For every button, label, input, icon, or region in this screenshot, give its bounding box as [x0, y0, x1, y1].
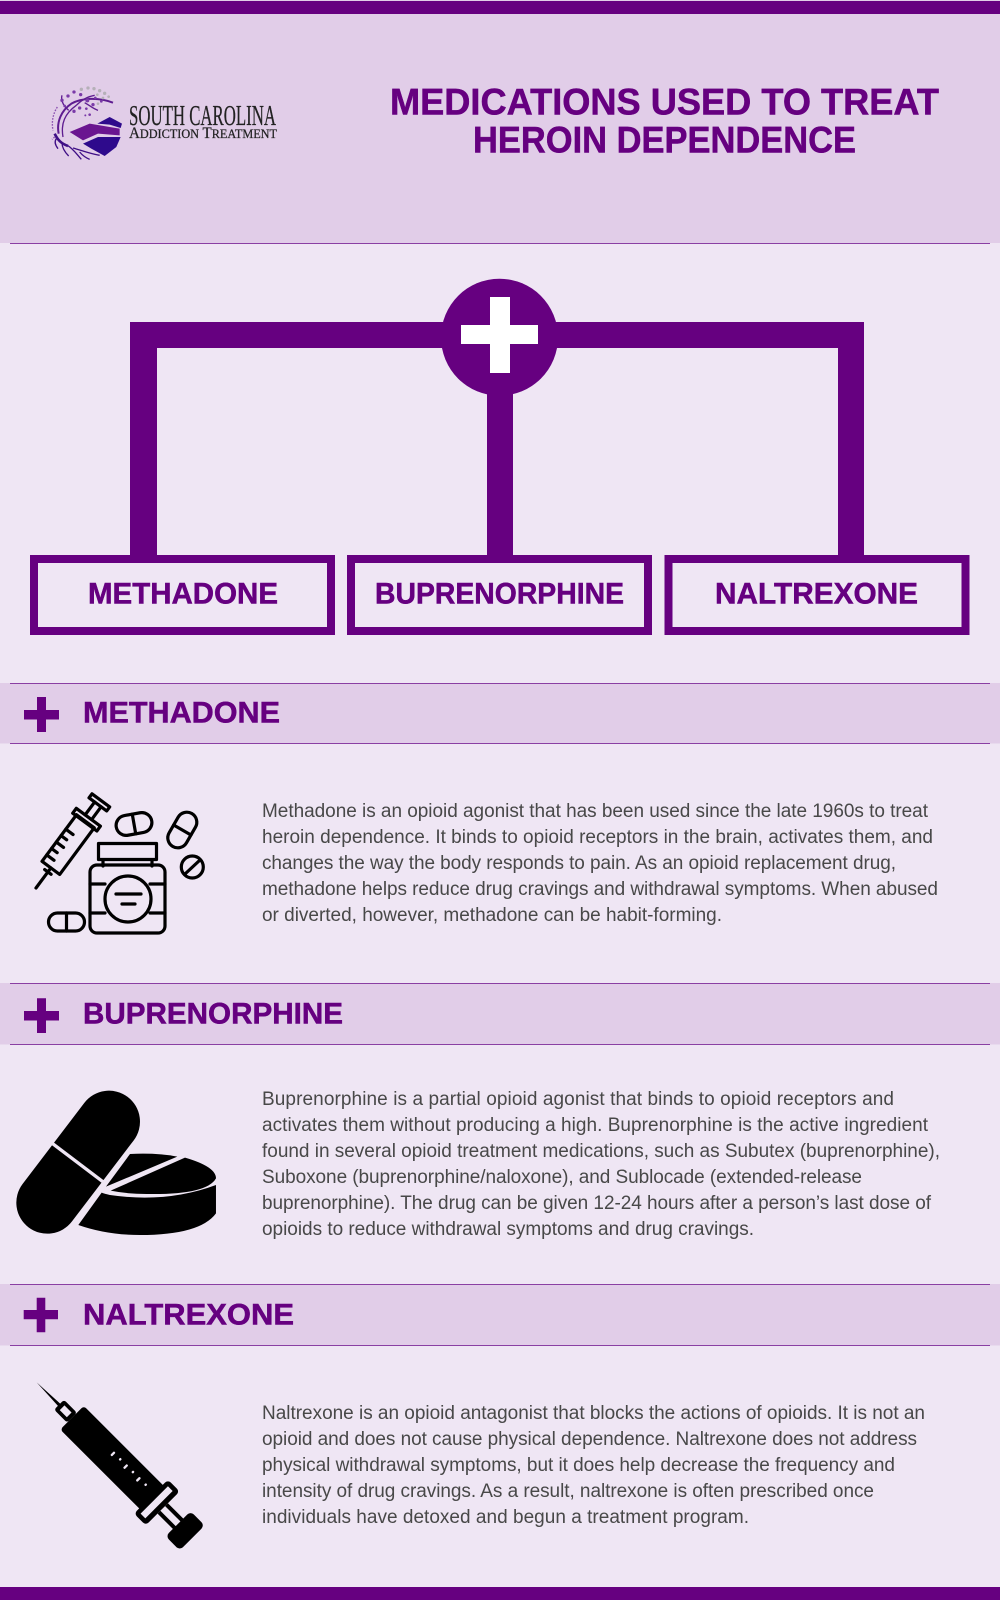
text: buprenorphine: buprenorphine). The drug can be given 12-24 hours after a person’s last dose of — [262, 1193, 932, 1214]
text: naltrexone: Naltrexone is an opioid antagonist that blocks the actions of opioids. It is not an — [262, 1403, 925, 1424]
box: naltrexone — [668, 559, 966, 631]
heading band: methadone — [0, 683, 1000, 744]
section: methadone — [0, 683, 1000, 933]
icon: syringe — [20, 1365, 209, 1555]
text: naltrexone: physical withdrawal symptoms, but it does help decrease the frequency and — [262, 1455, 895, 1476]
box: methadone — [34, 559, 331, 631]
heading band: buprenorphine — [0, 983, 1000, 1045]
heading band: methadone: METHADONE — [83, 696, 280, 730]
bottom bar — [0, 1587, 1000, 1600]
text: methadone: methadone helps reduce drug cravings and withdrawal symptoms. When abused — [262, 879, 938, 900]
text: naltrexone: individuals have detoxed and begun a treatment program. — [262, 1507, 749, 1528]
box: buprenorphine — [351, 559, 648, 631]
icon: capsule and tablet — [47, 1122, 216, 1235]
logo — [52, 86, 277, 159]
text: buprenorphine — [262, 1089, 940, 1240]
logo wordmark: SOUTH CAROLINA — [129, 100, 276, 132]
header panel — [0, 0, 1000, 244]
plus circle — [441, 279, 558, 396]
text: buprenorphine: activates them without producing a high. Buprenorphine is the active ingredient — [262, 1115, 929, 1136]
text: methadone — [262, 801, 938, 926]
logo wordmark — [129, 100, 277, 142]
top bar — [0, 1, 1000, 14]
section: buprenorphine — [0, 983, 1000, 1240]
flow diagram — [34, 279, 966, 631]
text: methadone: changes the way the body responds to pain. As an opioid replacement drug, — [262, 853, 896, 874]
text: naltrexone: opioid and does not cause physical dependence. Naltrexone does not address — [262, 1429, 917, 1450]
text: naltrexone: intensity of drug cravings. As a result, naltrexone is often prescribed once — [262, 1481, 874, 1502]
heading band: buprenorphine: BUPRENORPHINE — [83, 998, 343, 1030]
connector lines — [130, 322, 864, 555]
text: methadone: heroin dependence. It binds to opioid receptors in the brain, activates them, and — [262, 827, 933, 848]
box: buprenorphine: BUPRENORPHINE — [375, 578, 624, 610]
heading band: naltrexone: NALTREXONE — [83, 1298, 294, 1332]
heading band: naltrexone — [0, 1284, 1000, 1346]
text: methadone: or diverted, however, methadone can be habit-forming. — [262, 905, 722, 926]
box: naltrexone: NALTREXONE — [715, 578, 918, 610]
logo emblem — [52, 86, 122, 159]
text: buprenorphine: found in several opioid treatment medications, such as Subutex (buprenorphine), — [262, 1141, 940, 1162]
section: naltrexone — [0, 1284, 1000, 1555]
title: MEDICATIONS USED TO TREAT — [390, 82, 939, 122]
text: buprenorphine: Buprenorphine is a partial opioid agonist that binds to opioid receptors and — [262, 1089, 894, 1110]
text: naltrexone — [262, 1403, 925, 1528]
logo wordmark: ADDICTION TREATMENT — [129, 125, 277, 142]
title — [390, 82, 939, 160]
text: methadone: Methadone is an opioid agonist that has been used since the late 1960s to treat — [262, 801, 929, 822]
header rule — [10, 243, 990, 244]
text: buprenorphine: opioids to reduce withdrawal symptoms and drug cravings. — [262, 1219, 754, 1240]
text: buprenorphine: Suboxone (buprenorphine/naloxone), and Sublocade (extended-release — [262, 1167, 862, 1188]
box: methadone: METHADONE — [88, 578, 278, 610]
icon: syringe, medicine bottle and pills — [24, 791, 203, 933]
title: HEROIN DEPENDENCE — [473, 120, 856, 160]
